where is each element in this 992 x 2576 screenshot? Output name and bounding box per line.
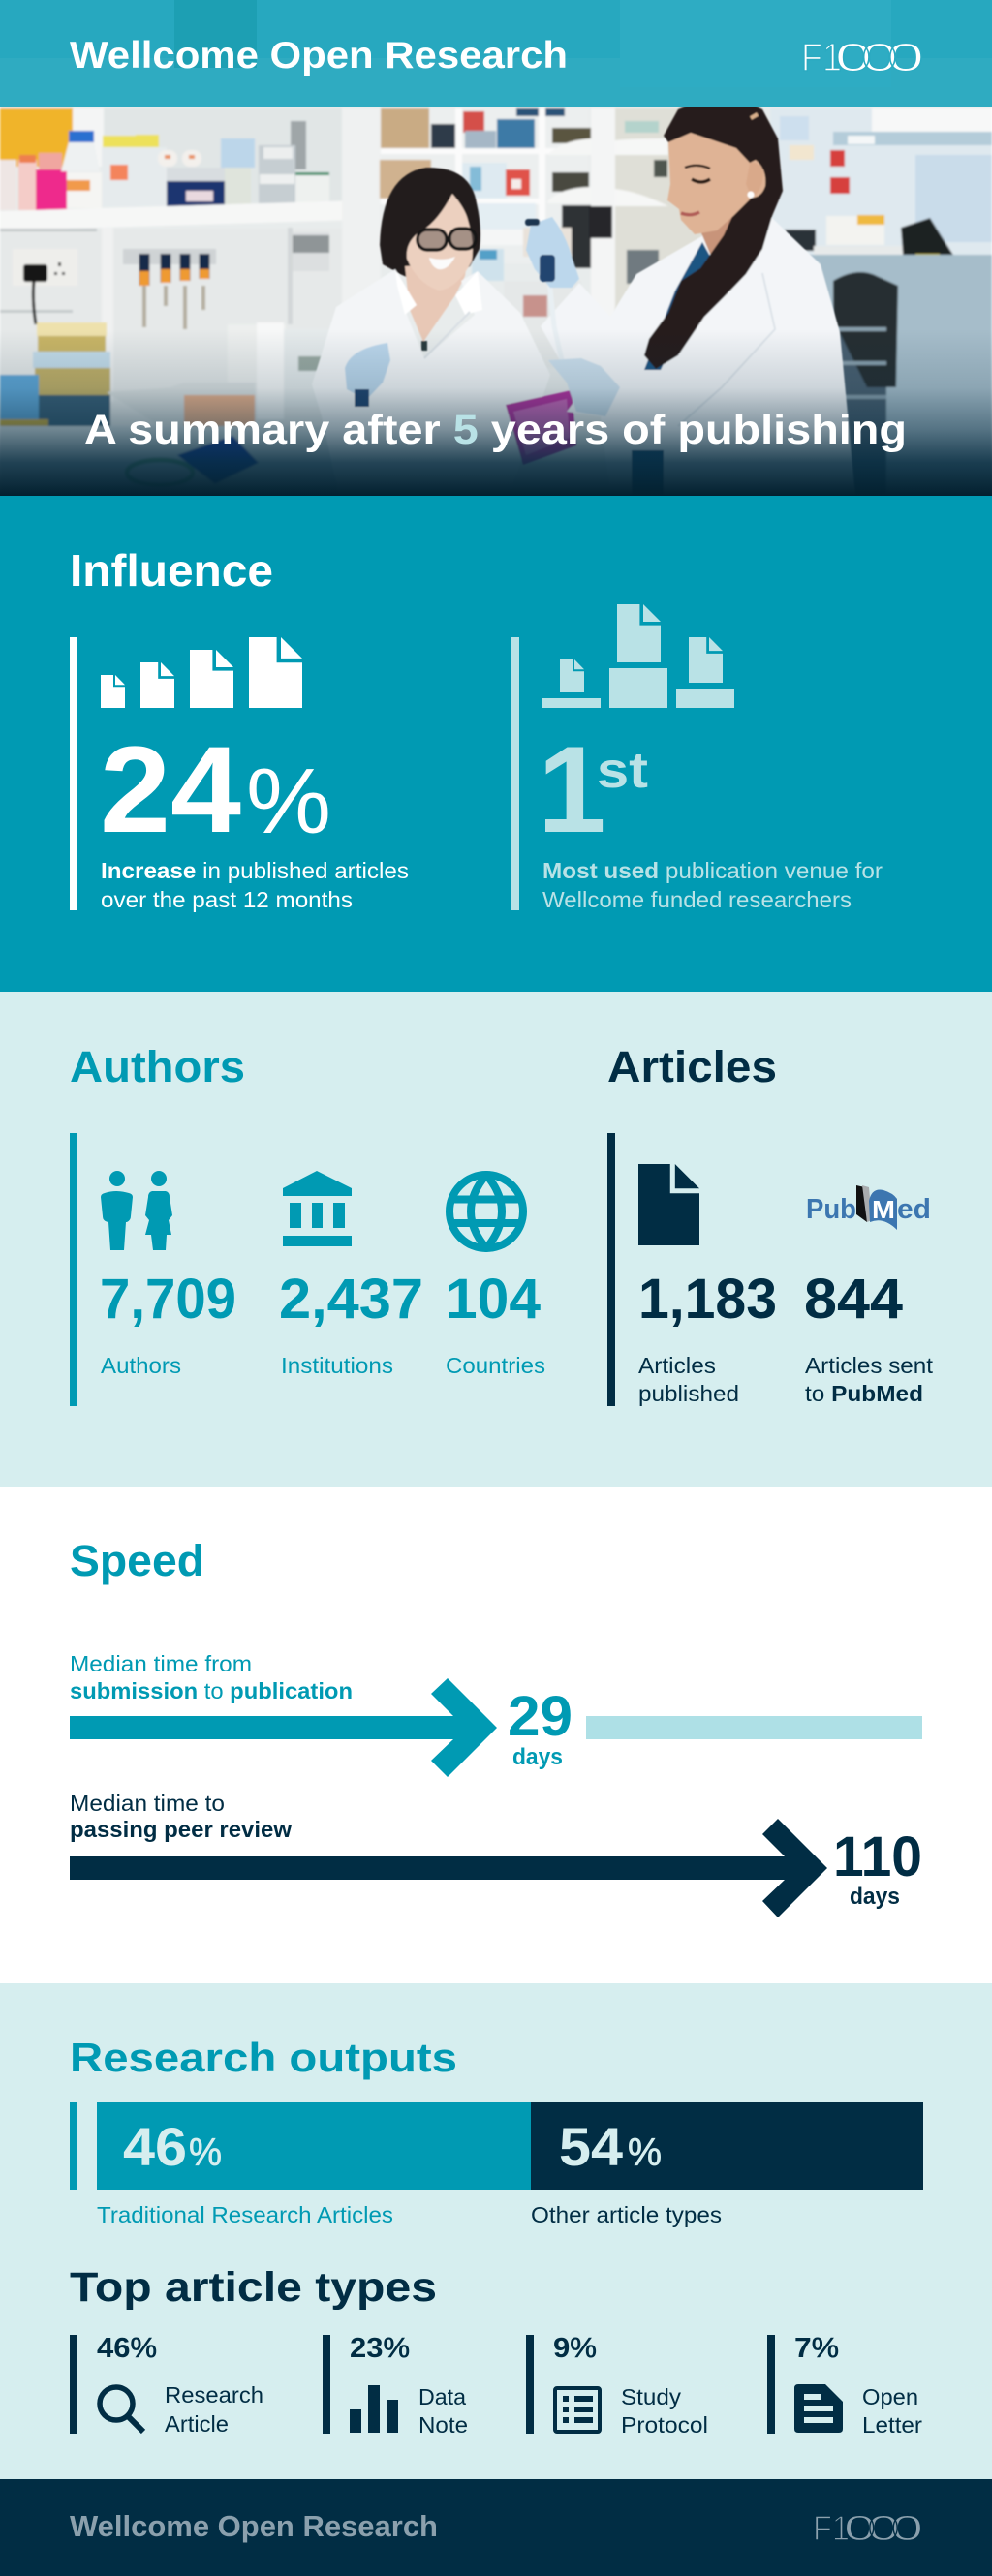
F1000 logo [813, 2508, 921, 2548]
number: 1st: 1 [538, 721, 606, 858]
percent sign: % [246, 750, 331, 853]
number: 110: 110 [833, 1825, 922, 1888]
label: Research [165, 2382, 264, 2407]
glove and pipette [345, 343, 390, 400]
unit: days: days [850, 1884, 900, 1910]
remaining track [586, 1716, 922, 1739]
F1000 logo: F1 [813, 2508, 850, 2548]
footer [0, 2479, 992, 2576]
icon: globe [450, 1175, 523, 1248]
label: Open [862, 2384, 918, 2409]
tip boxes [37, 322, 107, 336]
number: 24: 24 [100, 721, 241, 858]
right lab [771, 110, 990, 254]
authors column [70, 1042, 545, 1406]
stat: 24 percent increase [70, 637, 409, 912]
logo: PubMed: ed [897, 1194, 931, 1225]
arrow: 29 days [70, 1678, 497, 1777]
percent: 23% [350, 2333, 410, 2364]
heading: influence: Influence [70, 545, 273, 596]
label line 2: Protocol [621, 2412, 708, 2438]
icon: list [555, 2388, 600, 2432]
raised pipette and glove [549, 279, 562, 360]
number: sent to PubMed: 844 [804, 1268, 903, 1331]
icon: growing documents [101, 637, 302, 708]
header colour band [0, 0, 992, 58]
peer review timeline [70, 1791, 922, 1917]
heading: speed: Speed [70, 1536, 204, 1585]
submission to publication timeline [70, 1651, 922, 1777]
pipette rack [123, 249, 216, 264]
label line 2: Article [165, 2411, 229, 2437]
percent: 9% [553, 2333, 597, 2364]
header photo banner [0, 0, 992, 501]
photo bottom fade [0, 329, 992, 496]
percent sign: % [628, 2131, 662, 2174]
type: study protocol [526, 2333, 708, 2438]
F1000 logo: 000 [835, 35, 921, 79]
percent: 46% [97, 2333, 157, 2364]
unit: days: days [512, 1744, 563, 1770]
type: data note [323, 2333, 468, 2438]
coat [541, 218, 855, 496]
label: articles sent: Articles sent [805, 1353, 934, 1378]
panel: research outputs [0, 1983, 992, 2479]
lower wall [0, 229, 342, 496]
percent sign: % [189, 2131, 222, 2174]
caption line 2: over the past 12 months [101, 887, 353, 912]
hair [380, 168, 480, 291]
centre shelves [343, 108, 361, 199]
shelf [0, 201, 343, 229]
header title: Wellcome Open Research [70, 35, 568, 77]
logo: PubMed: Pub [806, 1194, 856, 1225]
heading: top article types: Top article types [70, 2264, 437, 2311]
F1000 logo: F1 [801, 35, 842, 79]
number: institutions: 2,437 [279, 1268, 423, 1331]
value: 46 percent: 46 [123, 2116, 187, 2177]
articles column [607, 1042, 934, 1406]
F1000 logo [804, 44, 920, 71]
icon: bars [350, 2385, 398, 2433]
researchers [312, 102, 855, 496]
neck [701, 217, 732, 255]
coat [312, 268, 549, 453]
superscript st: st [597, 743, 648, 799]
photo caption: A summary after 5 years of publishing [84, 407, 907, 453]
caption: most used: Most used publication venue for [542, 858, 883, 883]
socket plate [13, 249, 78, 286]
label: Median time from [70, 1651, 252, 1676]
label line 2: Note [418, 2412, 468, 2438]
label: traditional: Traditional Research Articles [97, 2202, 393, 2227]
number: 29: 29 [508, 1685, 573, 1748]
icon: magnifier [100, 2387, 143, 2432]
icon: institution [283, 1171, 352, 1246]
stacked bar: article split [70, 2102, 923, 2190]
icon: letter [794, 2384, 843, 2433]
caption: increase: Increase in published articles [101, 858, 409, 883]
type: research article [70, 2333, 264, 2437]
label: institutions: Institutions [281, 1353, 393, 1378]
label: Study [621, 2384, 682, 2409]
logo: PubMed [806, 1185, 931, 1230]
type: open letter [767, 2333, 922, 2438]
label: published: published [638, 1381, 739, 1406]
label: authors: Authors [101, 1353, 181, 1378]
label: Data [418, 2384, 466, 2409]
label bold: passing peer review [70, 1817, 292, 1842]
neck and chest [405, 261, 467, 342]
bench items [228, 324, 286, 383]
label: Median time to [70, 1791, 225, 1816]
icon: podium of documents [542, 604, 734, 708]
panel: authors and articles [0, 992, 992, 1487]
label: countries: Countries [446, 1353, 545, 1378]
caption line 2: Wellcome funded researchers [542, 887, 852, 912]
F1000 logo: 000 [844, 2509, 921, 2548]
heading: research outputs: Research outputs [70, 2035, 457, 2080]
logo: PubMed: M [872, 1195, 895, 1224]
icon: people [101, 1171, 172, 1250]
label: other: Other article types [531, 2202, 722, 2227]
label: to PubMed: to PubMed [805, 1381, 923, 1406]
heading: authors: Authors [70, 1042, 245, 1091]
number: articles published: 1,183 [638, 1268, 777, 1331]
label: articles: Articles [638, 1353, 716, 1378]
face [667, 133, 765, 234]
top left shelf wall [104, 108, 360, 205]
icon: document [638, 1164, 699, 1245]
label bold: submission to publication [70, 1678, 353, 1703]
smile [429, 257, 455, 269]
arrow: 110 days [70, 1819, 827, 1917]
number: countries: 104 [446, 1268, 541, 1331]
researcher left [312, 167, 549, 453]
glasses [418, 229, 476, 250]
heading: articles: Articles [607, 1042, 777, 1091]
lower glove [548, 358, 620, 416]
researcher right [525, 102, 855, 496]
shirt [644, 242, 712, 370]
magenta rack [506, 390, 576, 465]
footer title: Wellcome Open Research [70, 2509, 438, 2543]
value: 54 percent: 54 [559, 2116, 623, 2177]
stat: first venue [512, 604, 883, 912]
label line 2: Letter [862, 2412, 922, 2438]
number: authors: 7,709 [100, 1268, 236, 1331]
face [407, 194, 473, 291]
panel: speed [0, 1487, 992, 1983]
lab background photo [0, 107, 992, 484]
hair [644, 102, 783, 369]
panel: influence [0, 496, 992, 992]
percent: 7% [794, 2333, 839, 2364]
